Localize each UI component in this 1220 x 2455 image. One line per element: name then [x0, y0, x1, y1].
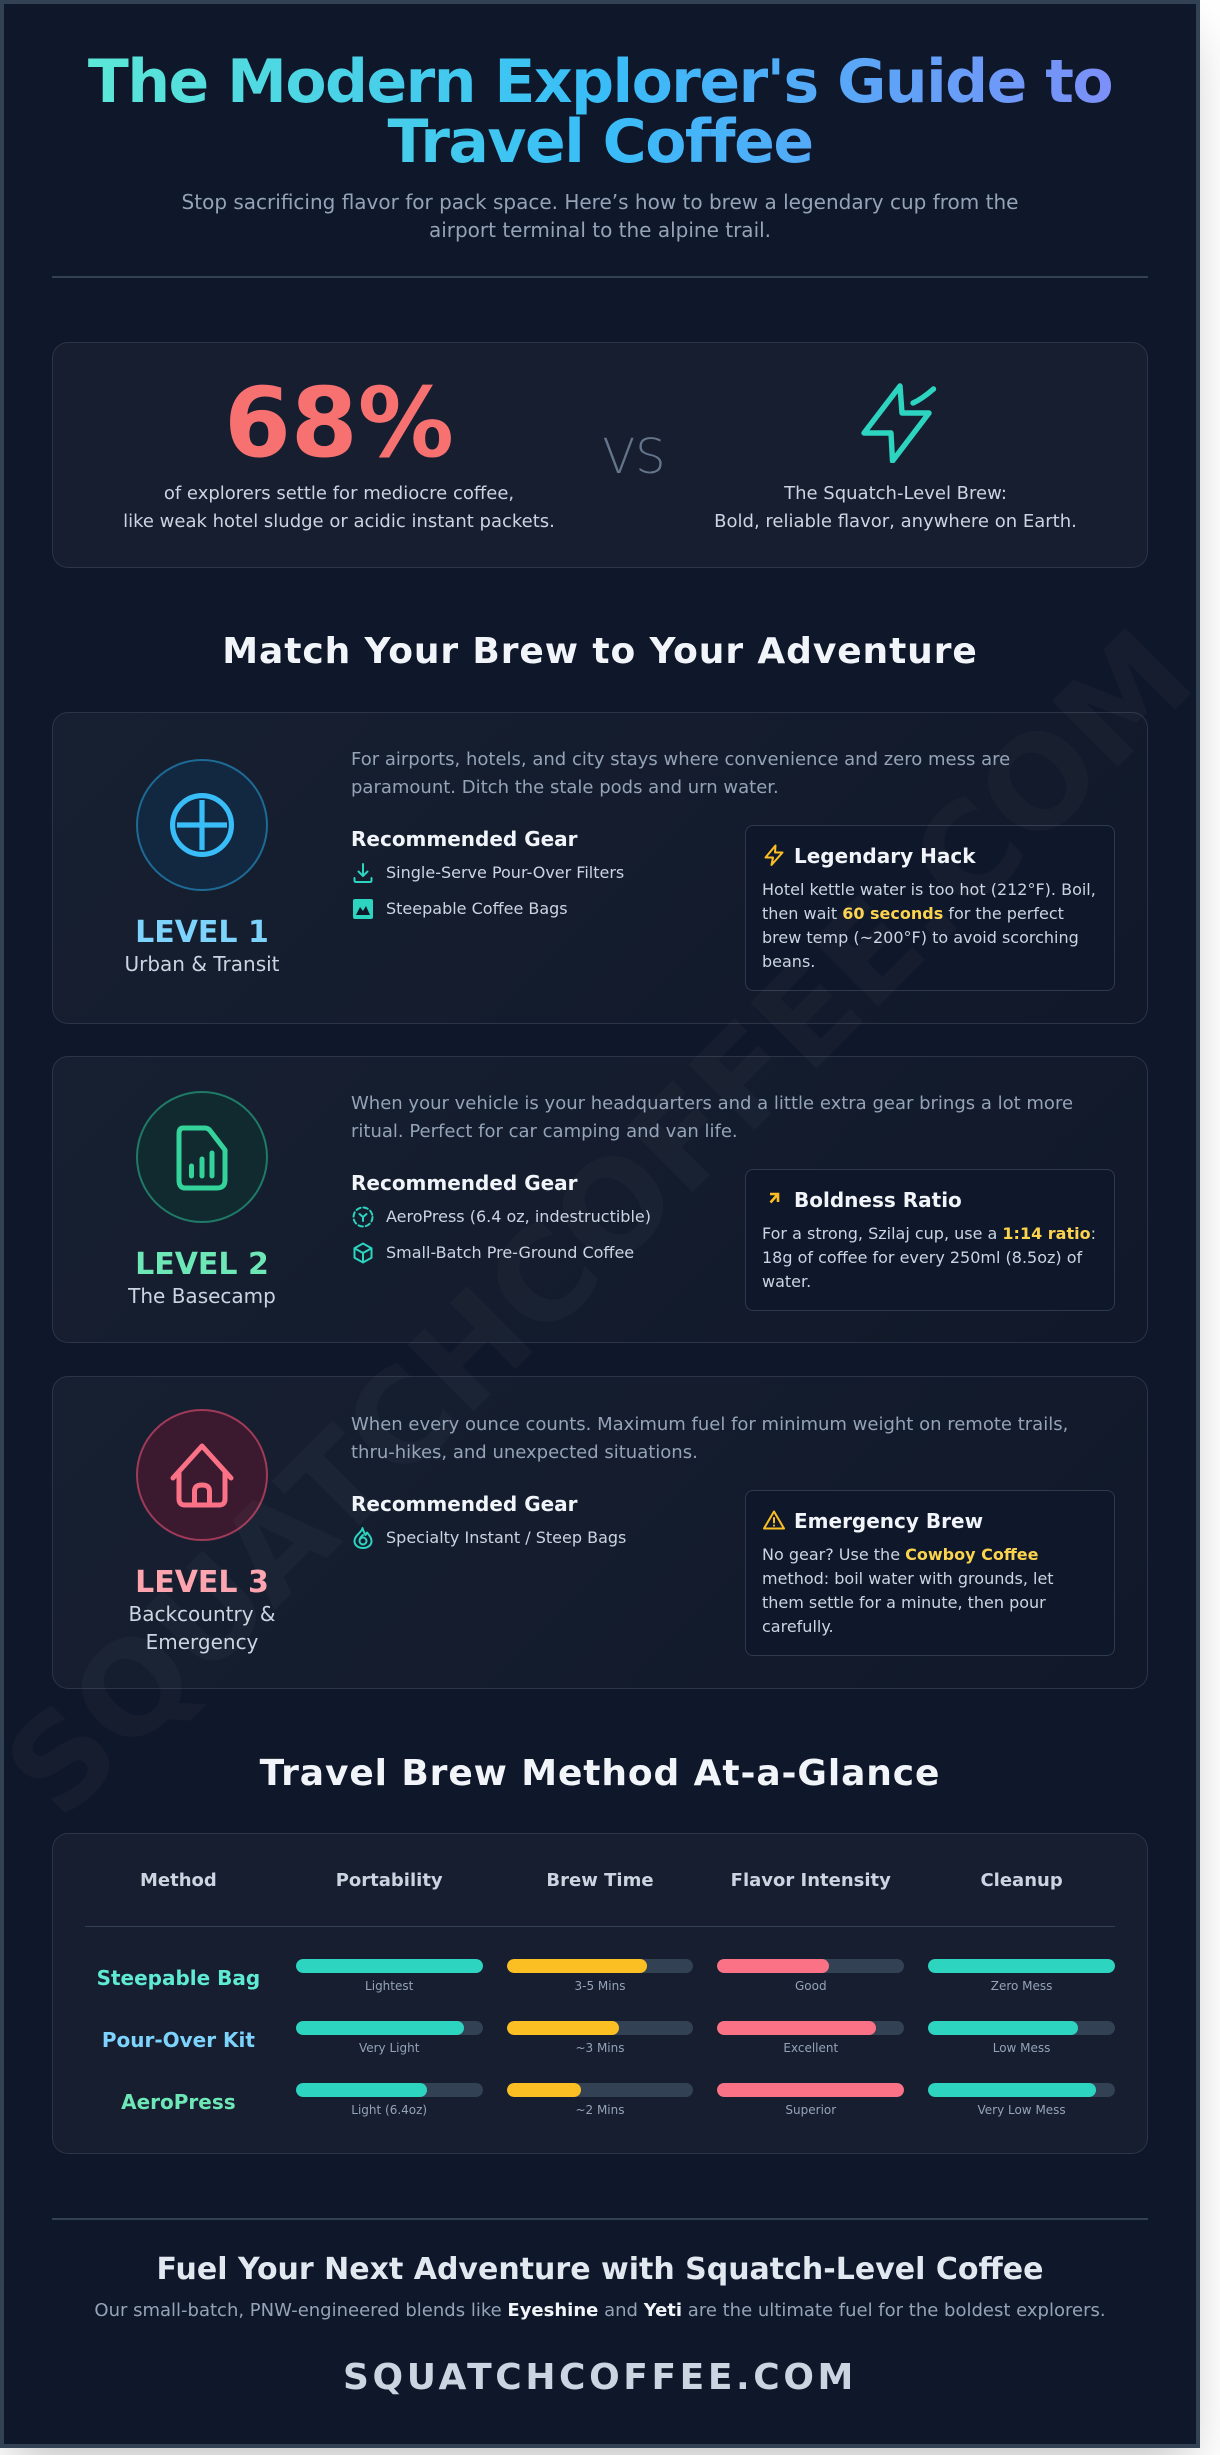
level 3 name: Backcountry & [128, 1602, 276, 1626]
bar: brew time: ~3 Mins [575, 2041, 625, 2055]
level 3 description [351, 1414, 1068, 1463]
level 2 label: LEVEL 2 [135, 1247, 269, 1282]
level 2 description [351, 1093, 1073, 1142]
level 3 label: LEVEL 3 [135, 1564, 269, 1600]
column heading: Brew Time [546, 1870, 654, 1891]
bar: brew time: ~2 Mins [575, 2103, 625, 2117]
bar: brew time: 3-5 Mins [574, 1979, 625, 1993]
title: Travel Coffee [387, 107, 813, 177]
callout text: water. [762, 1272, 811, 1290]
gear item: Single-Serve Pour-Over Filters [386, 862, 624, 882]
bar: flavor: Superior [785, 2103, 836, 2117]
callout: boldness ratio [745, 1169, 1115, 1311]
icon: flame [354, 1527, 372, 1549]
gear item: Small-Batch Pre-Ground Coffee [386, 1242, 634, 1262]
level 3 name [128, 1602, 276, 1654]
bar: flavor [717, 2083, 904, 2117]
bar: cleanup [928, 2021, 1115, 2055]
bar: flavor [717, 1959, 904, 1993]
gear heading: Recommended Gear [351, 827, 578, 851]
icon: box [354, 1242, 372, 1264]
VS label: VS [602, 428, 666, 484]
footer text: Our small-batch, PNW-engineered blends like Eyeshine and Yeti are the ultimate fuel for the boldest explorers. [94, 2300, 1106, 2321]
bar: portability: Very Light [359, 2041, 419, 2055]
icon: image [353, 899, 373, 919]
subtitle: Stop sacrificing flavor for pack space. Here’s how to brew a legendary cup from the [182, 190, 1018, 214]
callout: legendary hack [745, 825, 1115, 991]
bar: flavor [717, 2021, 904, 2055]
bar: cleanup: Low Mess [993, 2041, 1050, 2055]
icon: level 2 circle [136, 1091, 268, 1223]
level 1 description: For airports, hotels, and city stays where convenience and zero mess are [351, 749, 1010, 770]
bar: flavor: Excellent [783, 2041, 838, 2055]
footer heading: Fuel Your Next Adventure with Squatch-Level Coffee [157, 2252, 1043, 2287]
bar: brew time [507, 2083, 693, 2117]
callout text [762, 1544, 1054, 1636]
bar: brew time [507, 1959, 693, 1993]
callout text: brew temp (~200°F) to avoid scorching [762, 928, 1079, 946]
callout text: Hotel kettle water is too hot (212°F). Boil, [762, 880, 1096, 898]
bar: flavor: Good [795, 1979, 827, 1993]
icon: level 1 circle [136, 759, 268, 891]
icon: aeropress [352, 1206, 374, 1228]
row name: AeroPress [121, 2090, 236, 2114]
level 1 description [351, 749, 1010, 798]
column heading: Flavor Intensity [731, 1870, 891, 1891]
callout text: beans. [762, 952, 815, 970]
callout text: For a strong, Szilaj cup, use a 1:14 ratio: [762, 1224, 1096, 1242]
level 1 description: paramount. Ditch the stale pods and urn water. [351, 777, 779, 798]
column heading: Portability [336, 1870, 443, 1891]
subtitle [182, 190, 1018, 242]
callout text: No gear? Use the Cowboy Coffee [762, 1544, 1038, 1564]
icon: download [354, 863, 372, 883]
level 3 name: Emergency [146, 1630, 258, 1654]
level 1 label: LEVEL 1 [135, 915, 269, 950]
callout text: method: boil water with grounds, let [762, 1568, 1054, 1588]
bar: portability [296, 2083, 483, 2117]
brew caption [714, 482, 1077, 532]
callout: emergency brew [745, 1490, 1115, 1656]
level 2 name: The Basecamp [128, 1284, 276, 1308]
bar: portability: Lightest [365, 1979, 413, 1993]
icon: arrow [770, 1192, 780, 1204]
icon: warning [763, 1510, 785, 1530]
panel: level 1 [52, 712, 1148, 1024]
heading: method at a glance: Travel Brew Method At-a-Glance [260, 1753, 940, 1794]
callout text: carefully. [762, 1616, 834, 1636]
callout text [762, 1224, 1096, 1290]
level 2 description: When your vehicle is your headquarters and a little extra gear brings a lot more [351, 1093, 1073, 1114]
callout title: Legendary Hack [794, 844, 976, 868]
gear item: Steepable Coffee Bags [386, 898, 568, 918]
gear item: AeroPress (6.4 oz, indestructible) [386, 1206, 651, 1226]
icon: lightning bolt [861, 383, 936, 463]
icon: bolt [764, 844, 784, 866]
title: The Modern Explorer's Guide to [88, 47, 1112, 117]
gear heading: Recommended Gear [351, 1492, 578, 1516]
level 3 description: thru-hikes, and unexpected situations. [351, 1442, 698, 1463]
gear item: Specialty Instant / Steep Bags [386, 1528, 626, 1546]
title [52, 52, 1148, 172]
column heading: Cleanup [980, 1870, 1063, 1891]
callout text: then wait 60 seconds for the perfect [762, 904, 1064, 922]
callout text: 18g of coffee for every 250ml (8.5oz) of [762, 1248, 1082, 1266]
level 3 description: When every ounce counts. Maximum fuel for minimum weight on remote trails, [351, 1414, 1068, 1435]
stat caption [123, 482, 555, 532]
stat caption: of explorers settle for mediocre coffee, [164, 482, 514, 504]
level 2 description: ritual. Perfect for car camping and van life. [351, 1121, 738, 1142]
bar: brew time [507, 2021, 693, 2055]
gear heading: Recommended Gear [351, 1171, 578, 1195]
row name: Pour-Over Kit [102, 2028, 255, 2052]
stat: 68%: 68% [224, 367, 454, 479]
brew caption: The Squatch-Level Brew: [784, 482, 1007, 504]
callout title: Emergency Brew [794, 1509, 983, 1533]
callout text [762, 880, 1096, 970]
panel: level 2 [52, 1056, 1148, 1343]
icon: level 3 circle [136, 1409, 268, 1541]
stat caption: like weak hotel sludge or acidic instant packets. [123, 510, 555, 532]
brew caption: Bold, reliable flavor, anywhere on Earth. [714, 510, 1077, 532]
bar: cleanup [928, 1959, 1115, 1993]
footer url: SQUATCHCOFFEE.COM [343, 2357, 857, 2398]
row name: Steepable Bag [97, 1966, 260, 1990]
bar: cleanup: Zero Mess [991, 1979, 1052, 1993]
bar: portability: Light (6.4oz) [351, 2103, 427, 2117]
callout title: Boldness Ratio [794, 1188, 962, 1212]
callout text: them settle for a minute, then pour [762, 1592, 1046, 1612]
bar: portability [296, 2021, 483, 2055]
bar: cleanup: Very Low Mess [977, 2103, 1066, 2117]
panel: comparison table [52, 1833, 1148, 2154]
bar: portability [296, 1959, 483, 1993]
level 1 name: Urban & Transit [124, 952, 280, 976]
bar: cleanup [928, 2083, 1115, 2117]
column heading: Method [140, 1870, 217, 1891]
subtitle: airport terminal to the alpine trail. [429, 218, 771, 242]
heading: match your brew: Match Your Brew to Your Adventure [222, 631, 978, 672]
panel: stat comparison [52, 342, 1148, 568]
panel: level 3 [52, 1376, 1148, 1689]
